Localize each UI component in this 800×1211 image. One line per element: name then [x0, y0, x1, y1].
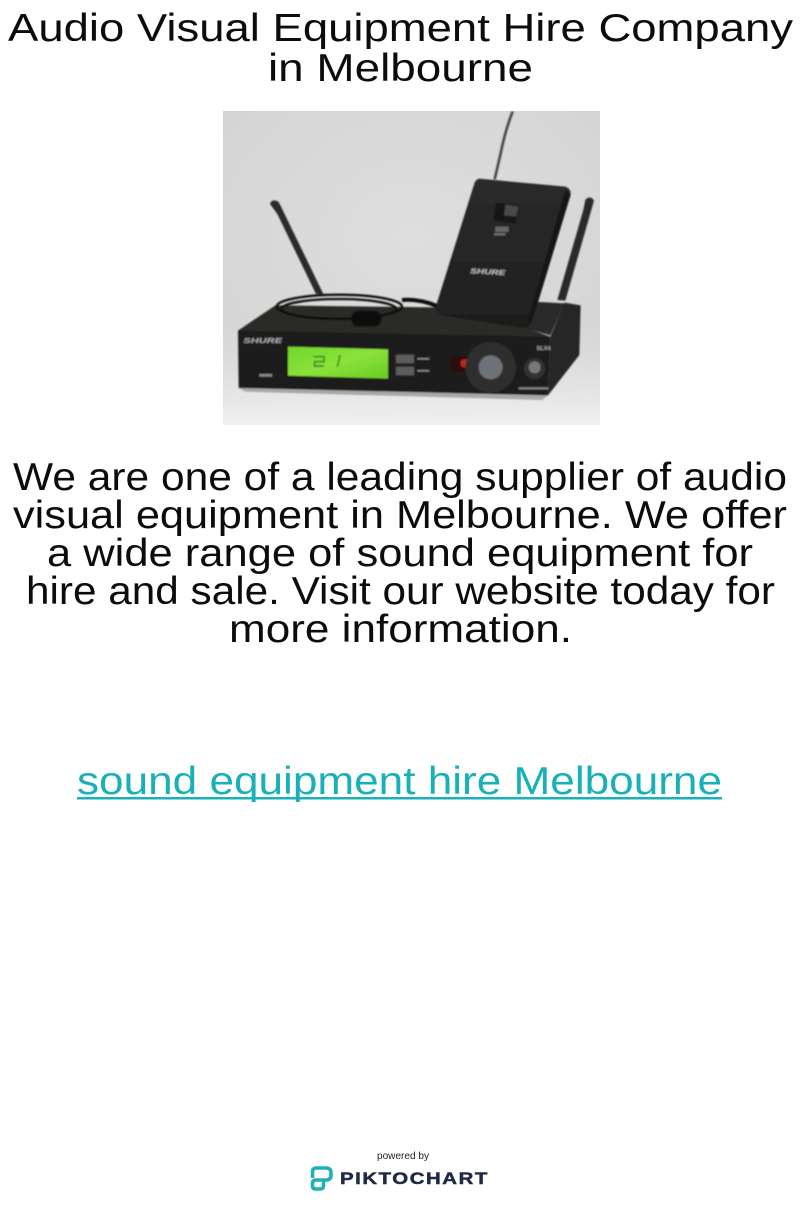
- icon: Piktochart logo mark: [312, 1168, 331, 1189]
- Piktochart wordmark: PIKTOCHART: [340, 1169, 489, 1188]
- icon: LCD display: [288, 347, 388, 379]
- title: in Melbourne: [268, 47, 533, 90]
- description text: visual equipment in Melbourne. We offer: [13, 494, 787, 537]
- description text: a wide range of sound equipment for: [47, 532, 753, 575]
- icon: antenna left: [270, 200, 323, 294]
- icon: receiver shadow: [239, 388, 548, 400]
- title: [8, 7, 794, 90]
- icon: lapel microphone cable coil: [277, 295, 437, 319]
- icon: antenna right: [557, 197, 594, 301]
- footer: powered by Piktochart: [312, 1151, 489, 1189]
- icon: receiver buttons: [396, 355, 414, 375]
- icon: power button: [524, 358, 545, 379]
- icon: lapel microphone: [351, 311, 381, 327]
- title: Audio Visual Equipment Hire Company: [8, 7, 794, 50]
- product photo: wireless microphone system: [223, 111, 600, 425]
- icon: bodypack transmitter: [436, 179, 571, 328]
- description text: [13, 456, 787, 651]
- icon: red display: [451, 356, 468, 374]
- icon: small labels on receiver: [259, 358, 548, 389]
- icon: bodypack cable: [495, 111, 513, 179]
- link: sound equipment hire Melbourne: sound equipment hire Melbourne: [77, 760, 722, 803]
- icon: receiver body: [238, 301, 581, 395]
- description text: hire and sale. Visit our website today for: [26, 570, 775, 613]
- receiver brand mark: SHURE: [243, 336, 284, 345]
- pack brand mark: SHURE: [470, 266, 507, 277]
- description text: more information.: [229, 608, 572, 651]
- receiver model label: SLX4: [537, 346, 551, 352]
- icon: control dial: [465, 342, 516, 393]
- powered by text: powered by: [377, 1151, 429, 1162]
- description text: We are one of a leading supplier of audio: [13, 456, 787, 499]
